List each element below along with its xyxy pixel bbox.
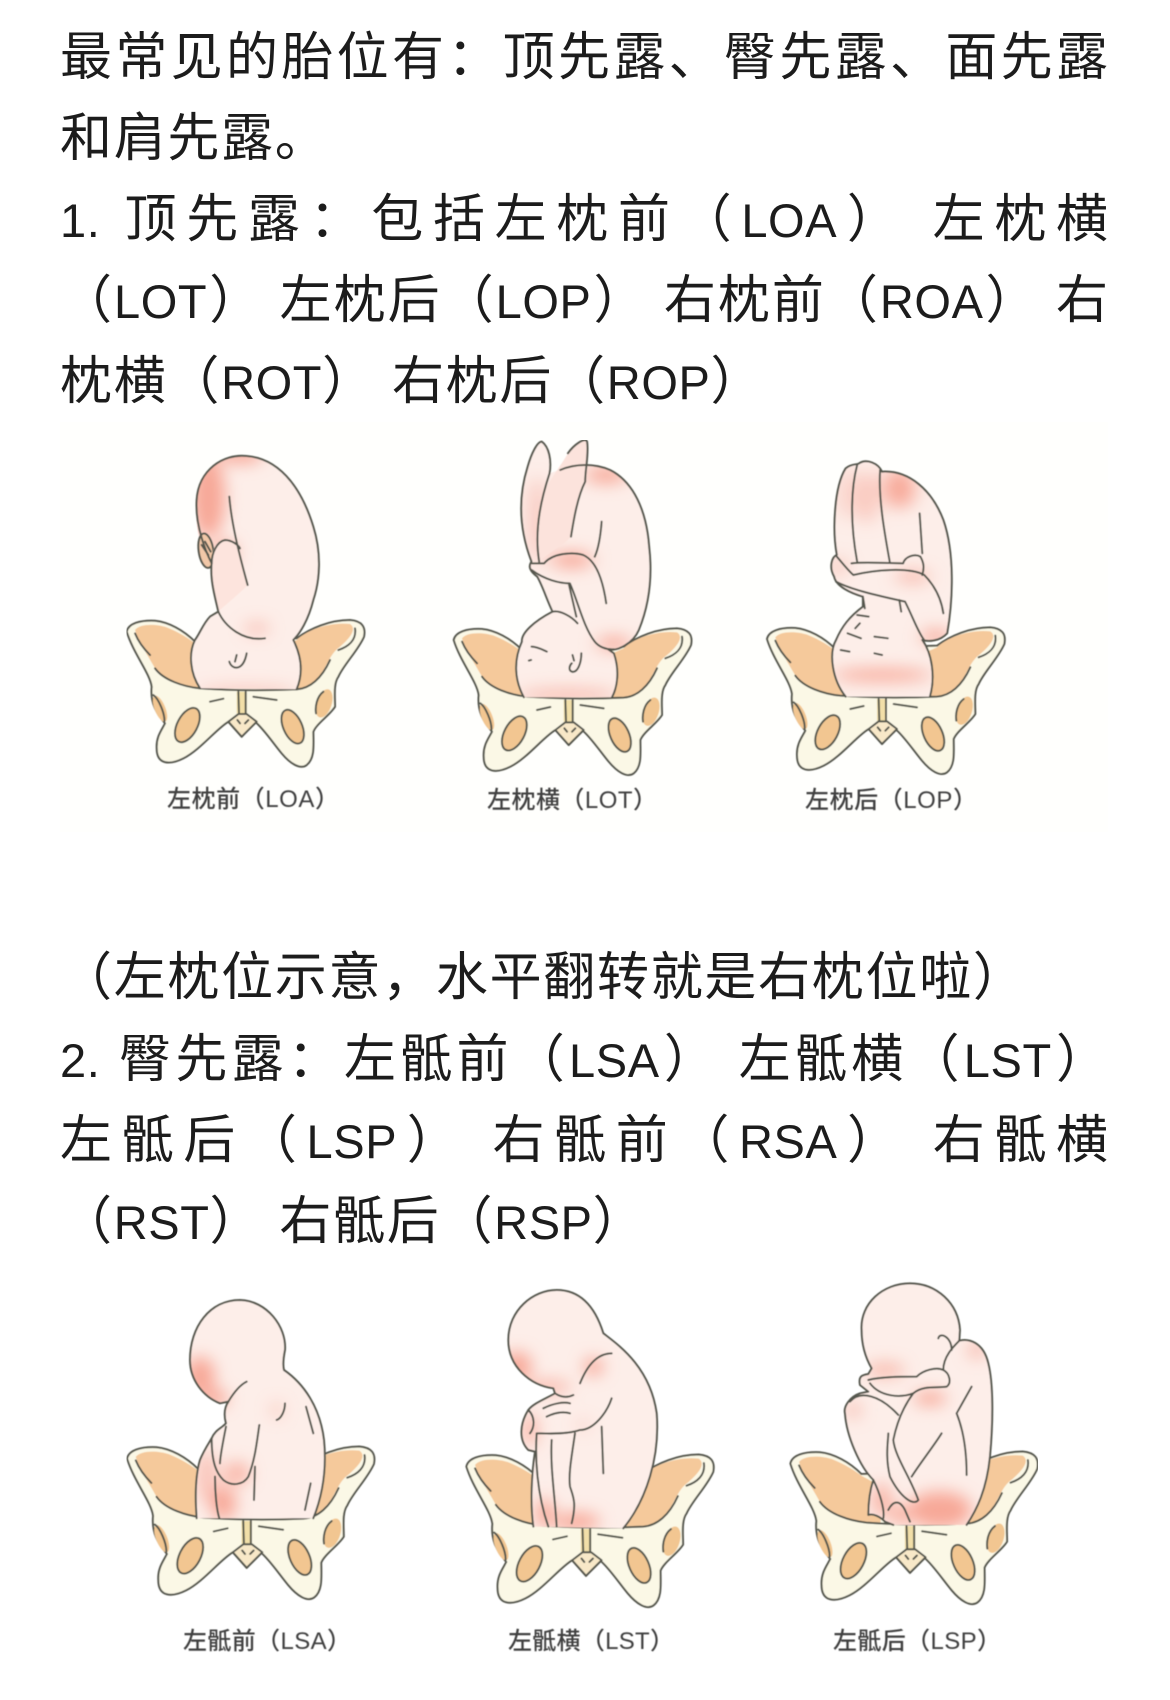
section 2 text: breech presentation: 左骶后（LSP） 右骶前（RSA） 右骶横 bbox=[60, 1112, 1108, 1170]
figure: LSA bbox=[127, 1300, 374, 1655]
fetus: LST bbox=[502, 1290, 657, 1530]
label: LSP: 左骶后（LSP） bbox=[833, 1628, 1001, 1655]
fetus: LOT bbox=[516, 440, 650, 701]
pelvis: LSP bbox=[790, 1451, 1038, 1604]
label: LOT: 左枕横（LOT） bbox=[487, 787, 657, 814]
section 2 text: breech presentation bbox=[60, 1031, 1108, 1251]
section 2 text: breech presentation: 2. 臀先露：左骶前（LSA） 左骶横（LST） bbox=[60, 1031, 1108, 1089]
label: LST: 左骶横（LST） bbox=[508, 1628, 674, 1655]
pelvis: LOT bbox=[454, 628, 691, 775]
label: LSA: 左骶前（LSA） bbox=[183, 1628, 351, 1655]
fetus: LOA bbox=[191, 447, 319, 696]
figure: LOT bbox=[454, 440, 691, 814]
caption: （左枕位示意，水平翻转就是右枕位啦） bbox=[60, 949, 1027, 1007]
fetus: LSA bbox=[185, 1300, 325, 1520]
figure: LOA bbox=[127, 447, 364, 813]
section 1 text: vertex presentation: （LOT） 左枕后（LOP） 右枕前（ROA） 右 bbox=[60, 272, 1108, 330]
pelvis: LST bbox=[466, 1454, 714, 1607]
section 1 text: vertex presentation bbox=[60, 191, 1108, 411]
section 1 text: vertex presentation: 枕横（ROT） 右枕后（ROP） bbox=[60, 353, 764, 411]
pelvis: LOP bbox=[767, 627, 1005, 774]
fetus: LSP bbox=[845, 1283, 992, 1528]
intro text bbox=[60, 29, 1108, 168]
pelvis: LOA bbox=[127, 620, 364, 767]
illustrations bbox=[126, 440, 1038, 1652]
intro text: 最常见的胎位有：顶先露、臀先露、面先露 bbox=[60, 29, 1108, 87]
figure: LST bbox=[466, 1290, 714, 1655]
fetus: LOP bbox=[830, 461, 952, 697]
figure: LSP bbox=[790, 1283, 1038, 1655]
section 1 text: vertex presentation: 1. 顶先露：包括左枕前（LOA） 左枕横 bbox=[60, 191, 1108, 249]
pelvis: LSA bbox=[127, 1446, 374, 1599]
intro text: 和肩先露。 bbox=[60, 110, 329, 168]
label: LOP: 左枕后（LOP） bbox=[805, 787, 977, 814]
label: LOA: 左枕前（LOA） bbox=[167, 786, 339, 813]
figure: LOP bbox=[767, 461, 1005, 814]
section 2 text: breech presentation: （RST） 右骶后（RSP） bbox=[60, 1193, 646, 1251]
